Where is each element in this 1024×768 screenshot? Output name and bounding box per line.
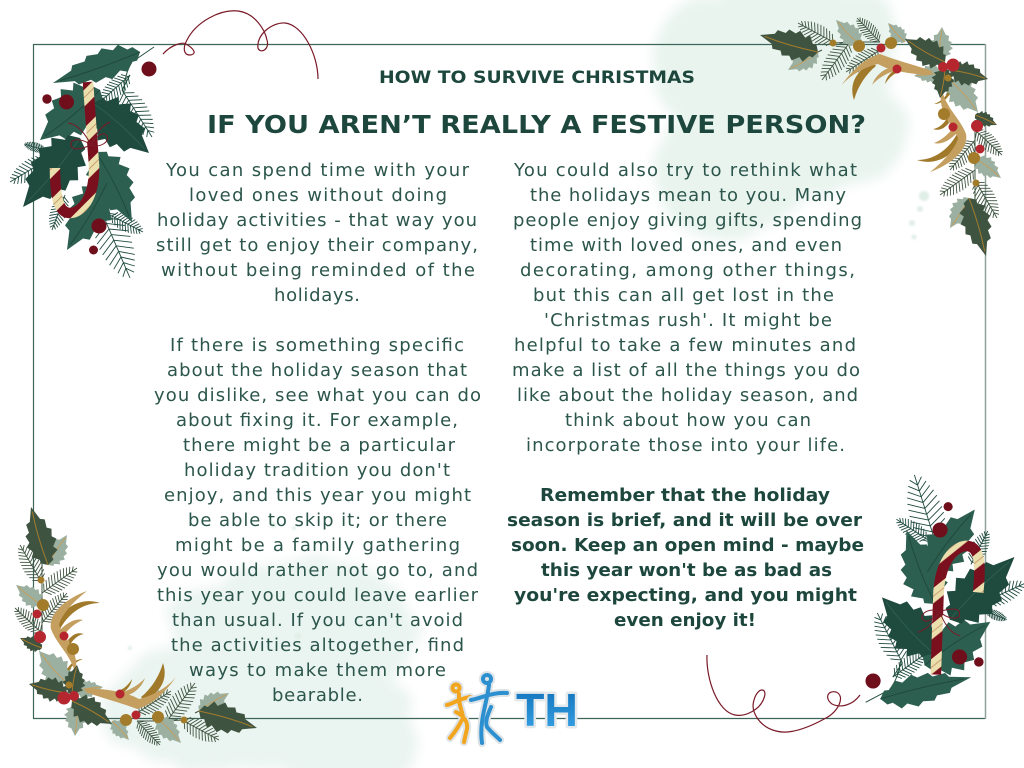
text block: right column: make a list of all the things you do xyxy=(512,360,860,381)
text block: right column: 'Christmas rush'. It might be xyxy=(544,310,832,331)
text block: right column: but this can all get lost in the xyxy=(533,285,834,306)
text block: right column: time with loved ones, and even xyxy=(530,235,842,256)
text block: left column: about fixing it. For example, xyxy=(176,410,458,431)
text block: right column: You could also try to rethink what xyxy=(513,160,857,181)
text block: left column: than usual. If you can't avoid xyxy=(172,610,463,631)
text block: left column: holidays. xyxy=(274,285,360,306)
text block: left column: without being reminded of the xyxy=(161,260,475,281)
text block: right column: like about the holiday season, and xyxy=(517,385,858,406)
text block: left column xyxy=(154,160,481,706)
text block: right column: the holidays mean to you. Many xyxy=(530,185,846,206)
text block: left column: You can spend time with your xyxy=(165,160,470,181)
text block: left column: ways to make them more xyxy=(189,660,446,681)
text block: bold closing message: Remember that the holiday xyxy=(540,485,830,506)
text block: left column: be able to skip it; or there xyxy=(188,510,447,531)
watercolour wash: top right xyxy=(650,0,929,240)
heading: how to survive christmas: HOW TO SURVIVE CHRISTMAS xyxy=(379,68,695,87)
decoration: candy cane and holly, bottom right xyxy=(853,465,1024,729)
decoration: antlers and berries, bottom left xyxy=(10,503,261,751)
text block: left column: holiday activities - that way you xyxy=(157,210,477,231)
text block: right column: incorporate those into your life. xyxy=(526,435,845,456)
text block: right column: think about how you can xyxy=(565,410,811,431)
text block: left column: you would rather not go to, and xyxy=(157,560,478,581)
text block: left column: this year you could leave earlier xyxy=(157,585,479,606)
text block: left column: there might be a particular xyxy=(183,435,456,456)
text block: bold closing message xyxy=(507,485,864,631)
logo lettering: TH xyxy=(516,684,578,736)
main title: IF YOU AREN’T REALLY A FESTIVE PERSON? xyxy=(207,110,866,139)
logo: TH with two figures xyxy=(447,675,578,743)
text block: left column: If there is something specific xyxy=(170,335,464,356)
ribbon curl: top xyxy=(163,11,318,79)
icon: blue figure xyxy=(471,675,507,743)
text block: bold closing message: season is brief, and it will be over xyxy=(507,510,862,531)
text block: left column: holiday tradition you don't xyxy=(184,460,450,481)
decoration: candy cane and holly, top left xyxy=(3,37,166,285)
watercolour wash: bottom left xyxy=(100,522,420,768)
text block: right column: people enjoy giving gifts, spending xyxy=(513,210,862,231)
ribbon curl: bottom xyxy=(707,655,860,732)
decoration: antlers and berries, top right xyxy=(756,12,1008,260)
text block: right column: decorating, among other things, xyxy=(520,260,855,281)
text block: left column: bearable. xyxy=(272,685,363,706)
text block: right column: helpful to take a few minutes and xyxy=(514,335,856,356)
text block: right column xyxy=(512,160,862,456)
text block: left column: might be a family gathering xyxy=(175,535,460,556)
icon: orange figure xyxy=(447,684,470,742)
text block: bold closing message: soon. Keep an open mind - maybe xyxy=(511,535,864,556)
text block: left column: you dislike, see what you can do xyxy=(154,385,481,406)
text block: bold closing message: you're expecting, and you might xyxy=(514,585,857,606)
text block: bold closing message: even enjoy it! xyxy=(614,610,756,631)
text block: bold closing message: this year won't be as bad as xyxy=(541,560,832,581)
text block: left column: loved ones without doing xyxy=(189,185,447,206)
text block: left column: still get to enjoy their company, xyxy=(156,235,478,256)
text block: left column: enjoy, and this year you might xyxy=(164,485,471,506)
text block: left column: the activities altogether, find xyxy=(171,635,464,656)
text block: left column: about the holiday season that xyxy=(167,360,467,381)
